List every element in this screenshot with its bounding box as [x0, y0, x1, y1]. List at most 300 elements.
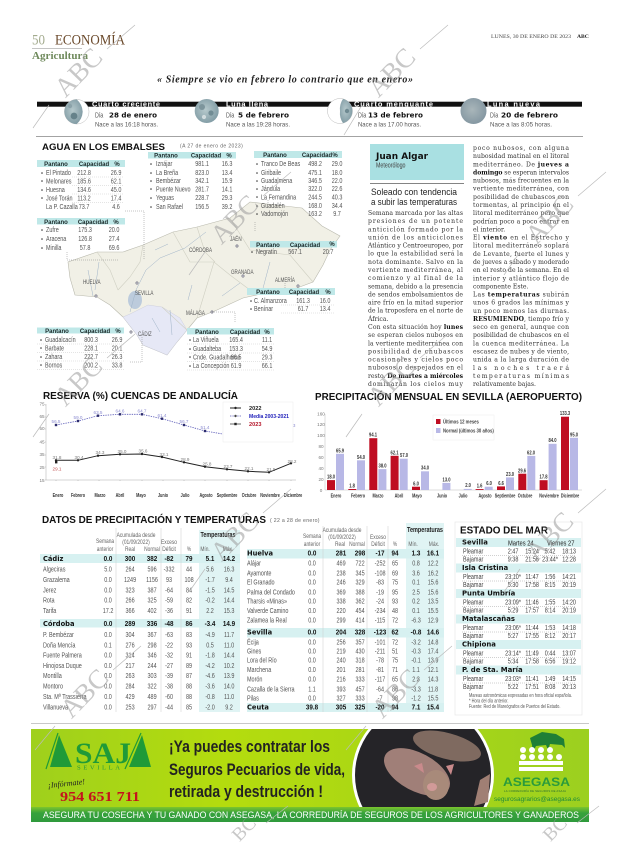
table: Huelva, Sevilla y Ceuta: 72 — [392, 617, 398, 625]
article text: column 2: posibilidad de chubascos con — [473, 194, 569, 201]
article text: column 2: litoral mediterráneo pero que — [473, 210, 569, 217]
column headers: (01/09/2022) — [328, 534, 356, 541]
table: Huelva, Sevilla y Ceuta: Pilas — [247, 695, 259, 703]
ABC watermarks: ABC — [365, 663, 425, 724]
table: Huelva, Sevilla y Ceuta: Cazalla de la Sierra — [247, 686, 295, 694]
article text: column 2: unos 6 grados las mínimas y — [473, 300, 570, 307]
table: Guadalcacín y otros: Capacidad — [80, 329, 111, 335]
table: Huelva, Sevilla y Ceuta: -234 — [375, 607, 386, 615]
table: Guadalcacín y otros: Barbate — [45, 345, 64, 353]
phase: luna nueva: 20 de febrero — [501, 111, 558, 119]
table: Guadalcacín y otros: 800.3 — [84, 336, 98, 344]
table: Huelva, Sevilla y Ceuta: 369 — [337, 589, 346, 597]
quote: « Siempre se vio en febrero lo contrario que en enero» — [157, 74, 413, 86]
date line: LUNES, 30 DE ENERO DE 2023 — [491, 34, 571, 40]
table: Huelva y Sevilla norte: Capacidad — [79, 162, 110, 168]
Isla Cristina: Bajamar — [463, 582, 484, 589]
table: Cádiz y Córdoba: -63 — [165, 631, 173, 639]
phase: luna llena: Día — [226, 112, 235, 120]
table: Cádiz y Córdoba: -82 — [164, 556, 174, 563]
ad headline: Seguros Pecuarios de vida, — [169, 760, 345, 779]
table: Huelva, Sevilla y Ceuta: Ceuta — [247, 704, 269, 712]
bar value labels: 6.6 — [498, 480, 504, 487]
legend — [433, 415, 494, 440]
table: Huelva, Sevilla y Ceuta: -19 — [376, 589, 384, 597]
Isla Cristina: Pleamar — [463, 573, 484, 581]
article text: column 2: interior y atlántico flojo de — [473, 275, 569, 282]
Punta Umbría: 23:09* — [505, 599, 521, 607]
point: 2023 — [53, 461, 62, 472]
table: Cádiz y Córdoba: 366 — [126, 607, 135, 615]
table: Huelva, Sevilla y Ceuta: -211 — [375, 648, 386, 656]
Isla Cristina: 8:15 — [545, 582, 556, 589]
phase: luna nueva: Nace a las 8:05 horas. — [490, 122, 552, 129]
map labels: JAÉN — [230, 235, 242, 243]
article headline: Soleado con tendencia — [371, 187, 457, 197]
ABC watermarks: ABC — [361, 351, 421, 412]
P. de Sta. María: P. de Sta. María — [462, 666, 523, 674]
table: Huelva y Sevilla norte: Huesna — [46, 186, 65, 194]
table: Huelva, Sevilla y Ceuta: 469 — [337, 560, 346, 568]
table: Huelva y Sevilla norte: 134.6 — [77, 186, 91, 194]
table: Cádiz y Córdoba: 429 — [126, 693, 135, 701]
table: Huelva y Sevilla norte: 26.9 — [111, 169, 122, 177]
table: Huelva, Sevilla y Ceuta: 16.1 — [427, 550, 439, 558]
table: Huelva y Sevilla norte: % — [114, 162, 120, 168]
table: Cádiz y Córdoba: -332 — [164, 566, 175, 574]
table: Cádiz y Córdoba: 93 — [166, 576, 172, 584]
notes: * Hora del día anterior. — [469, 698, 508, 704]
line: 2022: 21.5 — [267, 467, 276, 472]
P. de Sta. María: Bajamar — [463, 684, 484, 691]
P. de Sta. María — [462, 666, 576, 691]
axis labels: 25 — [39, 465, 45, 470]
ABC watermarks: ABC — [48, 351, 108, 412]
article text: column 2: nubosidad matinal en el litoral — [473, 153, 569, 160]
table: Guadalcacín y otros: Bornos — [45, 362, 62, 370]
article headline: a subir las temperaturas — [371, 197, 457, 207]
table: Huelva, Sevilla y Ceuta: 0.0 — [308, 666, 316, 674]
map labels: SEVILLA — [135, 290, 154, 297]
column headers: Mín. — [408, 541, 418, 548]
month labels: Septiembre — [217, 492, 238, 499]
table: Huelva, Sevilla y Ceuta: 3.6 — [412, 570, 420, 578]
Matalascañas: Bajamar — [463, 633, 484, 640]
table: Huelva, Sevilla y Ceuta: 15.5 — [428, 695, 439, 703]
Matalascañas: 1:53 — [545, 624, 556, 632]
table: Cádiz y Córdoba: 244 — [148, 662, 157, 670]
table: Cádiz y Córdoba: -2.0 — [205, 704, 215, 712]
table: Almanzora, Benínar — [247, 288, 335, 313]
line: 2022: 35.0 — [118, 449, 127, 454]
ABC watermarks: ABC — [48, 42, 108, 103]
table: Cádiz y Córdoba: 91 — [186, 607, 192, 615]
month labels: Marzo — [95, 492, 106, 499]
logo: ASEGASA: ASEGASA — [503, 775, 570, 789]
Chipiona: Pleamar — [463, 650, 484, 658]
line: 2022: 22.1 — [245, 466, 254, 471]
month labels: Mayo — [136, 492, 146, 499]
Matalascañas: 5:27 — [508, 633, 519, 640]
table: Huelva, Sevilla y Ceuta: -1.2 — [411, 695, 421, 703]
article text: column 2: podrían poco a poco entrar en — [473, 218, 569, 225]
line: 2022: 35.6 — [139, 448, 148, 454]
month labels: Abril — [116, 492, 124, 499]
table: Huelva, Sevilla y Ceuta: 201 — [337, 666, 346, 674]
table: Cádiz y Córdoba: -4.6 — [205, 672, 215, 680]
table: Tranco de Beas y otros: Guadalén — [261, 202, 285, 210]
notes — [469, 692, 572, 709]
table: Cádiz y Córdoba: 5.0 — [104, 566, 112, 574]
table: Cádiz y Córdoba: 88 — [186, 693, 192, 701]
table: Tranco de Beas y otros: Vadomojón — [261, 210, 289, 218]
bars: normal últimos 30 años — [336, 438, 578, 490]
table: Huelva, Sevilla y Ceuta: 216 — [337, 676, 346, 684]
table: Huelva, Sevilla y Ceuta: 7.1 — [412, 704, 421, 712]
Sevilla: Pleamar — [463, 548, 484, 556]
line: media 2003-2021: 47.8 — [265, 428, 274, 434]
moon: luna llena — [195, 99, 219, 123]
column headers: % — [187, 546, 191, 553]
table: Cádiz y Córdoba: 79 — [186, 556, 193, 563]
page number and section: ECONOMÍA — [55, 32, 125, 48]
article text: column 2: un poco menos las diurnas. — [473, 308, 569, 315]
axis labels: 20 — [318, 477, 324, 482]
article text: column 1: Con esta situación hoy lunes — [368, 324, 464, 331]
table: Cádiz y Córdoba: 276 — [126, 642, 135, 650]
table: Cádiz y Córdoba: -1.7 — [205, 576, 215, 584]
table: Cádiz y Córdoba: 17.2 — [103, 607, 114, 615]
table: Huelva, Sevilla y Ceuta: 65 — [392, 676, 398, 684]
table backgrounds — [40, 523, 444, 712]
column headers: Exceso — [161, 539, 177, 546]
table: Huelva, Sevilla y Ceuta: 0.1 — [412, 607, 420, 615]
line: 2022: 30.4 — [75, 455, 84, 460]
logo: ASAJA Sevilla: ¡Infórmate! — [47, 777, 86, 790]
table: Cádiz y Córdoba: 108 — [185, 576, 194, 584]
table: Huelva, Sevilla y Ceuta: 0.0 — [308, 598, 316, 606]
ABC watermarks: ABC — [361, 42, 421, 103]
table: Huelva, Sevilla y Ceuta: 0.0 — [308, 617, 316, 625]
month labels: Octubre — [518, 493, 533, 500]
month labels: Junio — [437, 493, 447, 500]
axis labels: 15 — [39, 478, 45, 483]
table: Huelva, Sevilla y Ceuta: -6.3 — [411, 617, 421, 625]
table: Huelva, Sevilla y Ceuta: 0.0 — [308, 550, 317, 558]
table: Cádiz y Córdoba: Rota — [43, 597, 55, 605]
table: La Viñuela y otros: 66.5 — [231, 354, 242, 362]
table: Cádiz y Córdoba: Fuente Palmera — [43, 652, 82, 660]
Chipiona: 17:58 — [525, 658, 539, 666]
phase: cuarto creciente — [92, 99, 160, 129]
table: Iznájar y otros: Yeguas — [156, 194, 174, 202]
legend: Media 2003-2021 — [249, 414, 289, 420]
article text: column 1: se esperan cielos nubosos en — [368, 332, 463, 339]
table: Tranco de Beas y otros: 9.7 — [333, 210, 341, 218]
table: Cádiz y Córdoba: -3.6 — [205, 683, 215, 691]
axis labels: 65 — [39, 414, 45, 419]
table: Huelva, Sevilla y Ceuta: 327 — [337, 695, 346, 703]
table: Cádiz y Córdoba: 382 — [147, 556, 157, 563]
table: Guadalcacín y otros: 228.1 — [84, 345, 98, 353]
table: Tranco de Beas y otros: Jándula — [261, 185, 280, 193]
phase: luna llena: 5 de febrero — [238, 111, 289, 119]
table: Huelva, Sevilla y Ceuta: 357 — [356, 639, 365, 647]
table: Huelva, Sevilla y Ceuta: 333 — [356, 695, 365, 703]
table: Cádiz y Córdoba: 284 — [126, 683, 135, 691]
Sevilla: 15:24 — [525, 548, 539, 556]
table: Cádiz y Córdoba: 93 — [186, 642, 192, 650]
table: Guadalcacín y otros: Zahara — [45, 353, 63, 361]
column headers: Exceso — [370, 534, 386, 541]
bar value labels: 34.0 — [421, 465, 429, 472]
article text: column 1: de sendos embolsamientos de — [368, 291, 463, 298]
bar value labels: 94.1 — [369, 432, 377, 439]
phase: luna llena — [226, 99, 290, 129]
photo: pigs — [352, 729, 494, 807]
P. de Sta. María: 1:49 — [545, 675, 556, 683]
table: Huelva, Sevilla y Ceuta: Alájar — [247, 560, 262, 568]
notes: Mareas astronómicas expresadas en hora oficial española. — [469, 692, 572, 698]
table: Huelva, Sevilla y Ceuta: 13.9 — [428, 657, 439, 665]
table: Cádiz y Córdoba: 0.5 — [206, 642, 214, 650]
phase: cuarto menguante: Día — [358, 112, 367, 120]
month labels: Agosto — [199, 492, 213, 499]
table: Iznájar y otros: 16.3 — [222, 160, 233, 168]
panel: Juan Algar byline — [370, 144, 464, 180]
month labels: Mayo — [412, 493, 422, 500]
table: Huelva, Sevilla y Ceuta: 15.4 — [427, 704, 439, 712]
table: Huelva, Sevilla y Ceuta: -101 — [375, 639, 386, 647]
table: Zufre, Aracena, Minilla: 69.6 — [109, 244, 120, 252]
table: Huelva, Sevilla y Ceuta: Sevilla — [247, 629, 272, 637]
month labels — [331, 493, 580, 500]
line: media 2003-2021: 59.0 — [74, 415, 83, 420]
table: Huelva y Sevilla norte: Melonares — [46, 178, 71, 186]
table: Huelva, Sevilla y Ceuta: -0.8 — [411, 629, 422, 637]
Matalascañas — [462, 615, 576, 640]
table: Cádiz y Córdoba: Hinojosa Duque — [43, 662, 82, 670]
logo: ASAJA Sevilla — [46, 733, 151, 805]
panel: Juan Algar byline: Meteorólogo — [376, 162, 406, 170]
moon: cuarto creciente — [64, 99, 89, 124]
table: Zufre, Aracena, Minilla: Capacidad — [78, 220, 109, 226]
Chipiona: 19:12 — [562, 658, 576, 666]
table: Huelva, Sevilla y Ceuta: 0.0 — [308, 579, 316, 587]
table: Cádiz y Córdoba: 0.0 — [104, 704, 112, 712]
map labels: ALMERÍA — [275, 276, 295, 284]
chart: reserva cuencas de Andalucía — [39, 389, 303, 499]
column headers: Semana — [96, 538, 115, 545]
article text: column 1: ocasionales y cielos poco — [368, 357, 463, 364]
article text: column 2: relativamente bajas. — [473, 381, 536, 388]
moon: cuarto menguante — [328, 98, 352, 124]
phase: luna nueva — [487, 99, 558, 129]
ABC watermarks: BC — [539, 813, 572, 846]
axis labels: 50 — [39, 426, 45, 431]
column headers: Normal — [349, 541, 365, 548]
month labels: Febrero — [71, 492, 85, 499]
phase: cuarto menguante — [354, 99, 433, 129]
table: Tranco de Beas y otros — [254, 151, 343, 218]
article text: column 2: unida a la larga duración de — [473, 357, 569, 364]
month labels: Febrero — [351, 493, 365, 500]
article text: column 1: dominarán los cielos muy — [368, 381, 464, 388]
map labels: CÓRDOBA — [189, 246, 212, 254]
Sevilla: Martes 24 — [508, 540, 534, 548]
Isla Cristina: 5:30 — [508, 582, 519, 589]
table: Tranco de Beas y otros: 498.2 — [308, 160, 322, 168]
table: Cádiz y Córdoba: 14.0 — [224, 683, 235, 691]
P. de Sta. María: 8:08 — [545, 684, 556, 691]
table: Huelva, Sevilla y Ceuta: -81 — [376, 666, 384, 674]
table: Negratín: 20.7 — [323, 248, 334, 256]
ad headline: ¡Ya puedes contratar los — [169, 737, 330, 756]
table: Huelva y Sevilla norte: José Torán — [46, 195, 73, 203]
table: Cádiz y Córdoba — [43, 530, 236, 712]
column headers: anterior — [97, 546, 113, 553]
table: Huelva, Sevilla y Ceuta: 72 — [392, 639, 398, 647]
table: Cádiz y Córdoba: 11.0 — [224, 642, 235, 650]
table: Huelva, Sevilla y Ceuta: 94 — [392, 704, 399, 712]
map labels: CÁDIZ — [138, 330, 152, 338]
axis labels: 35 — [39, 452, 45, 457]
table: Huelva, Sevilla y Ceuta: 0.0 — [308, 657, 316, 665]
column headers: Semana — [303, 533, 322, 540]
table: Zufre, Aracena, Minilla: Zufre — [46, 226, 59, 234]
table: Huelva, Sevilla y Ceuta: 333 — [356, 676, 365, 684]
table: Cádiz y Córdoba: 14.4 — [224, 597, 235, 605]
bar value labels: 23.0 — [506, 471, 514, 478]
table: Cádiz y Córdoba: 1249 — [124, 576, 137, 584]
P. de Sta. María: 11:41 — [525, 675, 539, 683]
axis labels: 60 — [318, 455, 324, 460]
Matalascañas: 17:55 — [525, 633, 539, 640]
table: Huelva, Sevilla y Ceuta: -24 — [376, 598, 384, 606]
month labels: Julio — [181, 492, 190, 499]
table: Huelva, Sevilla y Ceuta: 14.6 — [427, 629, 439, 637]
table: La Viñuela y otros: 54.9 — [262, 345, 273, 353]
table: Guadalcacín y otros: 26.9 — [112, 336, 123, 344]
table: Tranco de Beas y otros: La Fernandina — [261, 194, 297, 202]
table: Negratín — [250, 241, 337, 256]
logo: ASAJA Sevilla: 954 651 711 — [60, 790, 140, 805]
table: Huelva, Sevilla y Ceuta: 325 — [355, 704, 365, 712]
bar value labels: 29.6 — [518, 468, 526, 475]
P. de Sta. María: 20:13 — [562, 684, 576, 691]
article text: column 1: posibilidad de chubascos — [368, 348, 463, 355]
table: Cádiz y Córdoba: 253 — [126, 704, 135, 712]
Punta Umbría: 1:55 — [545, 599, 556, 607]
table: Huelva, Sevilla y Ceuta: -3.2 — [411, 639, 421, 647]
line: media 2003-2021: 63.5 — [94, 410, 103, 415]
column headers: % — [393, 541, 397, 548]
table: Huelva, Sevilla y Ceuta: 0.0 — [308, 676, 316, 684]
table: Huelva, Sevilla y Ceuta: Tharsis «Minas» — [247, 598, 287, 606]
bar value labels: 62.0 — [527, 450, 535, 457]
table: Cádiz y Córdoba: -60 — [165, 693, 173, 701]
ABC watermarks: ABC — [519, 189, 579, 250]
table: Huelva y Sevilla norte: La P. Cazalla — [46, 203, 78, 211]
table: Cádiz y Córdoba: 83 — [186, 631, 192, 639]
Chipiona: 23:14* — [505, 650, 521, 658]
table: Huelva, Sevilla y Ceuta: 0.0 — [308, 695, 316, 703]
table: Cádiz y Córdoba: 10.2 — [224, 662, 235, 670]
table: Cádiz y Córdoba: 16.3 — [224, 566, 235, 574]
table: Negratín: 567.1 — [288, 248, 302, 256]
article text: column 2: Las temperaturas subirán — [473, 292, 569, 298]
table: Cádiz y Córdoba: Doña Mencía — [43, 642, 76, 650]
month labels: Junio — [158, 492, 168, 499]
map labels: HUELVA — [83, 279, 101, 286]
table: Cádiz y Córdoba: 2.2 — [206, 607, 214, 615]
article text: column 2: en el resto de la semana. En el — [473, 267, 569, 274]
month labels: Julio — [459, 493, 468, 500]
table: Huelva, Sevilla y Ceuta: 93 — [392, 598, 398, 606]
table: Cádiz y Córdoba: 84 — [186, 587, 192, 595]
table: Cádiz y Córdoba: 402 — [148, 607, 157, 615]
table: Tranco de Beas y otros: Capacidad — [302, 153, 333, 159]
bar value labels: 13.0 — [443, 477, 451, 484]
table: Huelva, Sevilla y Ceuta: 13.5 — [428, 598, 439, 606]
bar value labels: 18.0 — [327, 474, 335, 481]
table: Cádiz y Córdoba: 264 — [126, 566, 135, 574]
table: Cádiz y Córdoba: -0.8 — [205, 693, 215, 701]
Isla Cristina: 20:19 — [562, 582, 576, 589]
table: Tranco de Beas y otros: 244.5 — [308, 194, 322, 202]
table: Huelva, Sevilla y Ceuta: 457 — [356, 686, 365, 694]
line: 2022: 25.8 — [203, 462, 212, 466]
line: media 2003-2021 — [52, 408, 296, 436]
table: Tranco de Beas y otros: 18.0 — [332, 169, 343, 177]
article text: column 1: aire frío en la mitad superior — [368, 300, 463, 307]
table: La Viñuela y otros: La Concepción — [193, 362, 230, 370]
table: Huelva, Sevilla y Ceuta: 328 — [355, 629, 365, 637]
P. de Sta. María: 14:15 — [562, 675, 576, 683]
table: Huelva, Sevilla y Ceuta: 15.6 — [428, 579, 439, 587]
article text: column 1: unión de los anticiclones — [368, 234, 463, 241]
table: Huelva, Sevilla y Ceuta: 0.0 — [308, 570, 316, 578]
table: Zufre, Aracena, Minilla: Minilla — [46, 244, 62, 252]
Isla Cristina: 14:21 — [562, 573, 576, 581]
phase: luna llena: Luna llena — [226, 99, 269, 108]
table: Cádiz y Córdoba: 0.0 — [104, 631, 112, 639]
point: 2023: 29.1 — [53, 466, 62, 472]
table: Cádiz y Córdoba: 0.0 — [104, 693, 112, 701]
bar value labels: 62.1 — [391, 450, 399, 457]
table: Negratín: Negratín — [256, 248, 277, 256]
Chipiona: 0:44 — [545, 650, 556, 658]
article text: column 1: lo que la estabilidad será la — [368, 251, 463, 258]
column headers: Real — [335, 541, 345, 548]
table: Huelva, Sevilla y Ceuta: Morón — [247, 676, 263, 684]
table: Huelva, Sevilla y Ceuta: 12.1 — [428, 666, 439, 674]
line: media 2003-2021: 64.7 — [138, 408, 147, 414]
table: Cádiz y Córdoba: Córdoba — [43, 620, 74, 628]
article text: column 2: RESUMIENDO, tiempo frío y — [473, 316, 570, 323]
table: Cádiz y Córdoba: -22 — [165, 642, 173, 650]
table: Huelva, Sevilla y Ceuta: 11.8 — [428, 686, 439, 694]
table: Huelva, Sevilla y Ceuta: 430 — [356, 648, 365, 656]
legend: Normal (últimos 30 años) — [443, 428, 494, 435]
article text: column 1: comienzo y al final de la — [368, 275, 463, 282]
axis labels: 160 — [317, 412, 325, 416]
date note: ( 22 a 28 de enero) — [270, 518, 320, 524]
table: Cádiz y Córdoba: -3.4 — [205, 621, 216, 628]
axis labels: 40 — [318, 466, 324, 471]
Sevilla: 18:13 — [562, 548, 576, 556]
table: Huelva y Sevilla norte: 45.0 — [111, 186, 122, 194]
